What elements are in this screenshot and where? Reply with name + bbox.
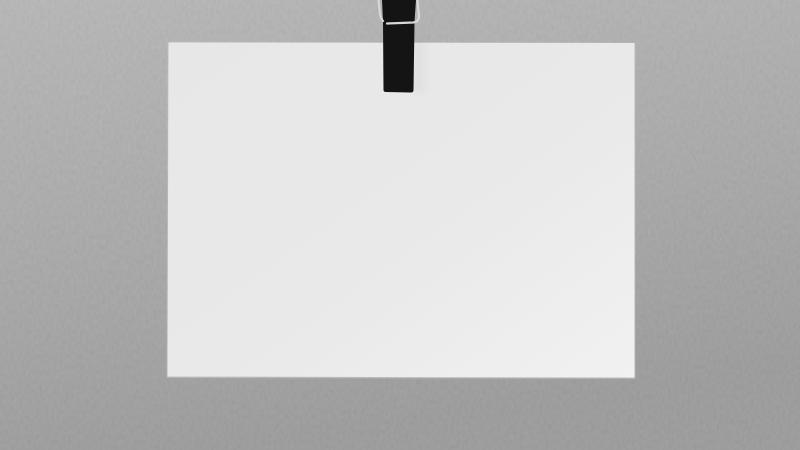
clip body <box>382 0 416 92</box>
clip wire <box>378 0 419 24</box>
blank paper card <box>167 42 635 378</box>
icon: black binder clip <box>378 0 419 92</box>
